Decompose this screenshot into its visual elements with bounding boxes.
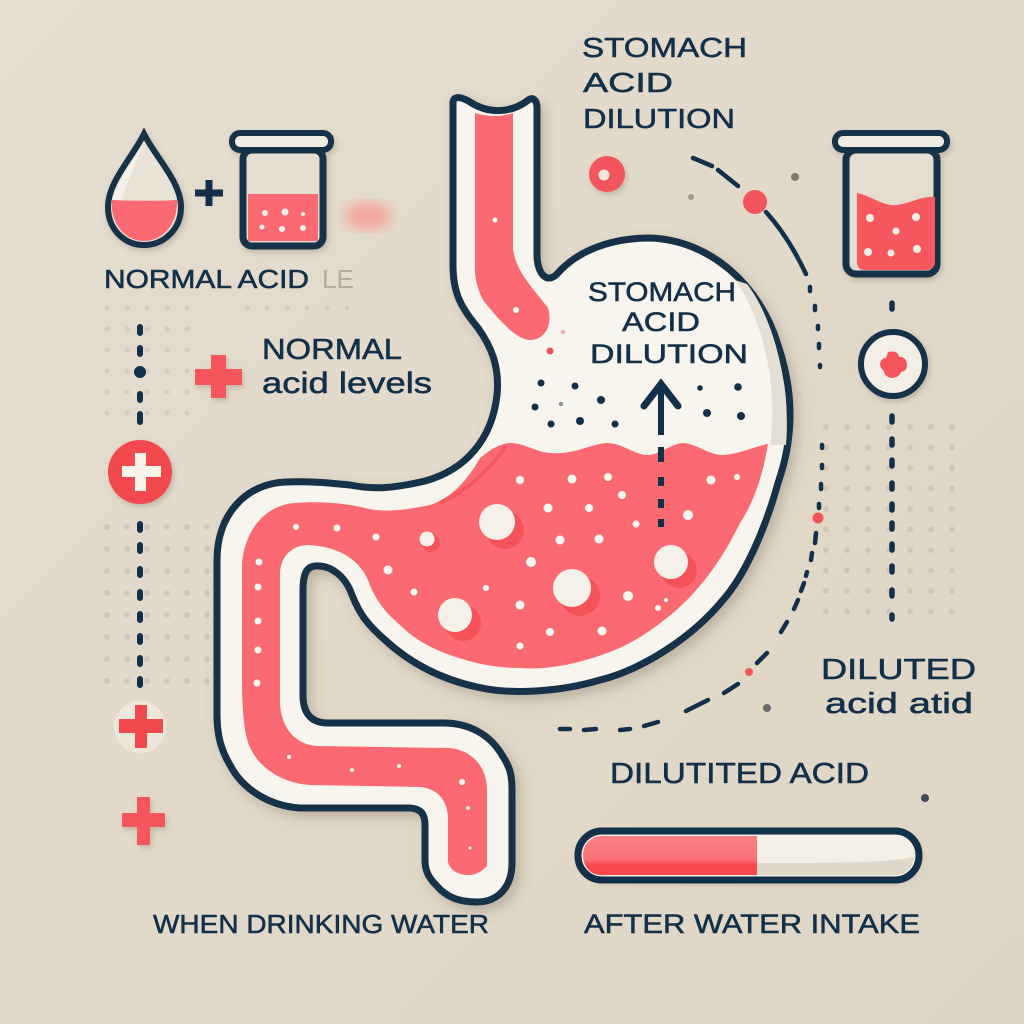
icon: plus	[122, 797, 165, 845]
icon: plus badge	[114, 701, 166, 753]
icon: beaker right	[835, 133, 947, 274]
label: normal acid le: NORMAL ACID	[104, 264, 309, 294]
label: normal acid levels	[262, 334, 432, 400]
dots under right beaker	[889, 303, 895, 619]
icon: beaker left	[232, 133, 331, 246]
label: normal acid levels: NORMAL	[262, 334, 402, 366]
arrow: acid rising	[644, 384, 678, 527]
stomach illustration	[217, 98, 790, 902]
label: diluted acid atid: DILUTED	[821, 654, 976, 686]
progress bar	[578, 831, 919, 880]
fluid shading	[440, 446, 506, 503]
acid bubbles	[254, 218, 740, 850]
label: when drinking water: WHEN DRINKING WATER	[153, 909, 489, 939]
title: stomach acid dilution: ACID	[583, 67, 673, 98]
stomach outer wall	[217, 98, 790, 902]
label: stomach acid dilution (inside)	[588, 277, 748, 369]
label: stomach acid dilution (inside): DILUTION	[590, 339, 748, 369]
inner wall shade	[735, 280, 787, 445]
icon: plus badge right	[861, 332, 925, 396]
label: normal acid le: LE	[322, 264, 354, 294]
stomach acid fluid	[242, 443, 768, 875]
icon: red plus circle	[108, 440, 172, 504]
label: stomach acid dilution (inside): STOMACH	[588, 277, 736, 307]
dot with red centre	[589, 156, 625, 192]
icon: water drop	[108, 134, 181, 245]
label: normal acid levels: acid levels	[262, 367, 432, 400]
icon: plus navy	[195, 180, 223, 206]
label: diluted acid: DILUTITED ACID	[610, 758, 869, 790]
label: diluted acid atid	[821, 654, 976, 720]
label: diluted acid atid: acid atid	[825, 688, 973, 720]
dotted line left	[137, 327, 143, 685]
title: stomach acid dilution: DILUTION	[583, 103, 735, 134]
icon: red plus	[195, 355, 242, 398]
faded red blur	[344, 202, 392, 230]
label: stomach acid dilution (inside): ACID	[622, 307, 700, 337]
dashed arc	[560, 158, 822, 730]
esophagus acid fluid	[475, 113, 549, 340]
title: stomach acid dilution: STOMACH	[582, 32, 747, 63]
large bubbles	[420, 504, 697, 641]
label: after water intake: AFTER WATER INTAKE	[584, 909, 920, 939]
title: stomach acid dilution	[582, 32, 747, 134]
navy particles	[532, 380, 745, 428]
